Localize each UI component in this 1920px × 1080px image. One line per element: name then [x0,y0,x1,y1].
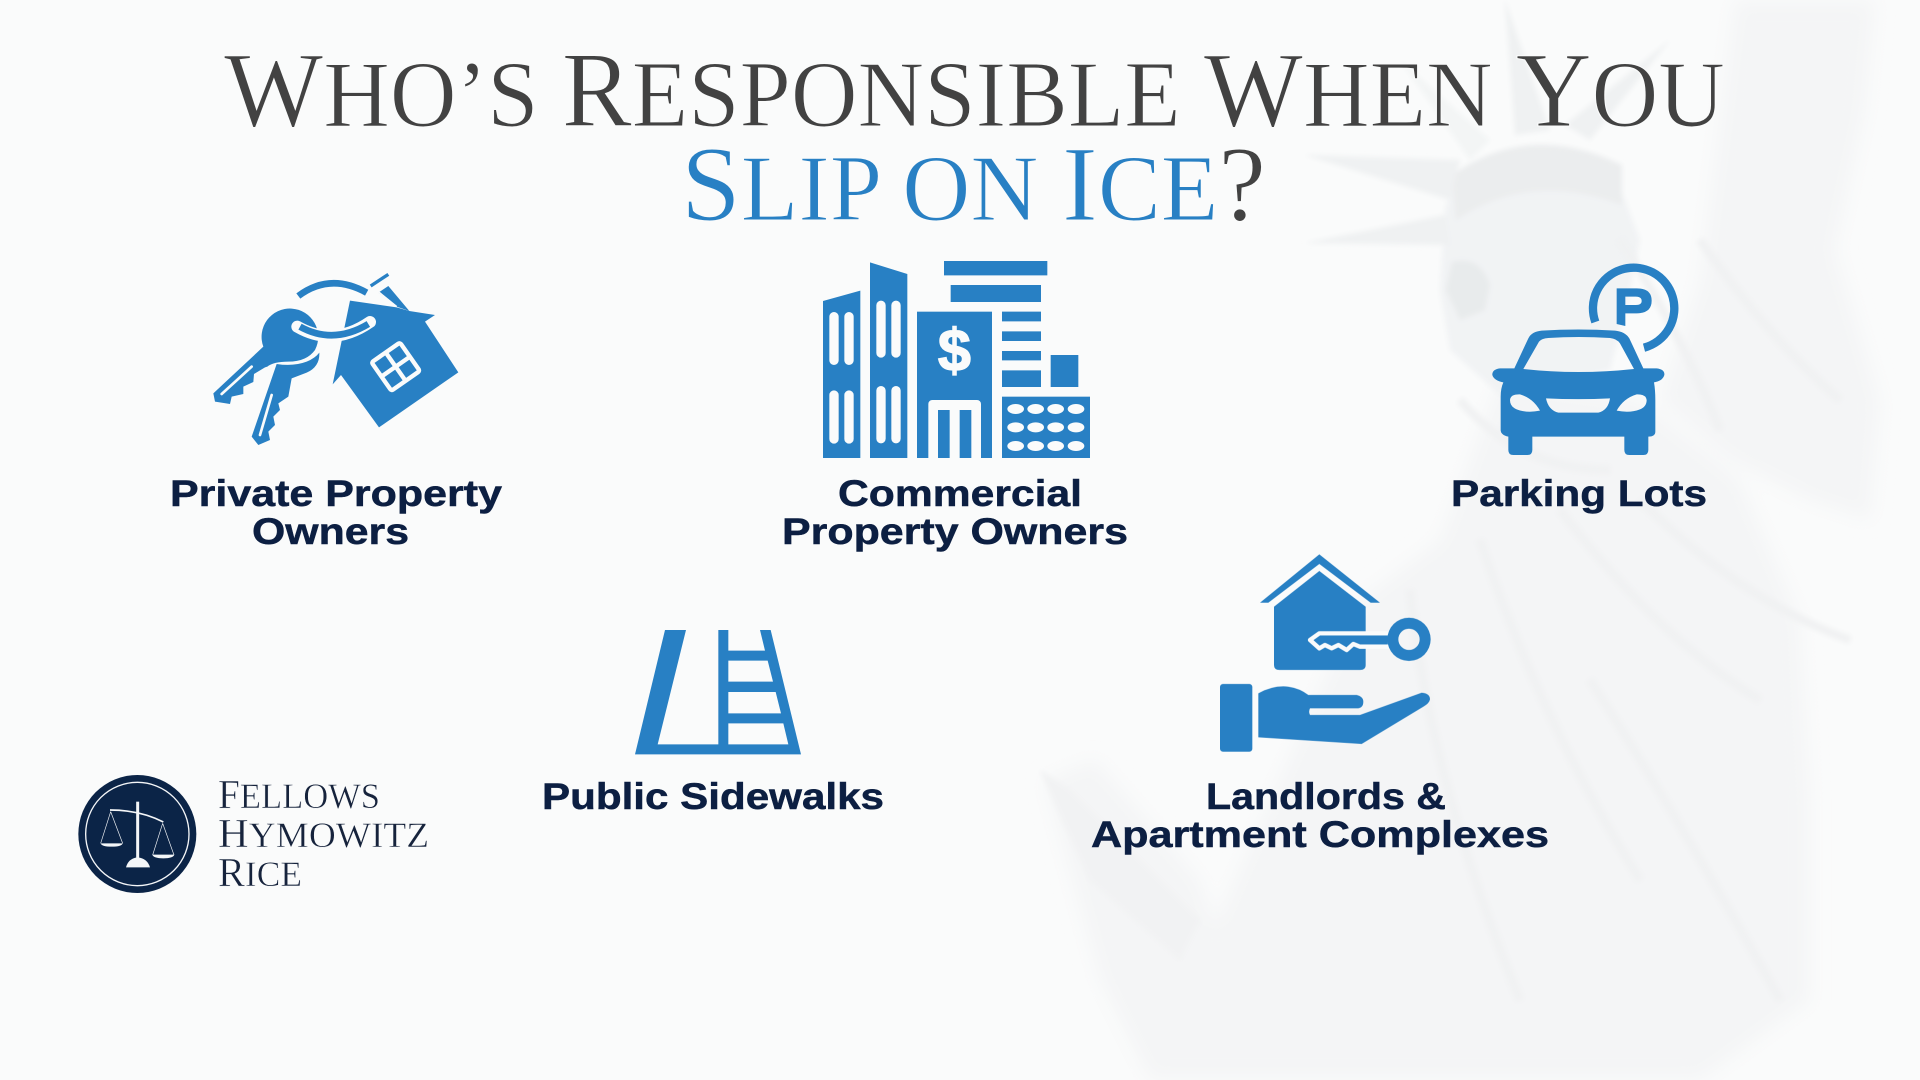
label: Apartment Complexes [1091,814,1549,855]
background: faint Statue of Liberty [1040,0,1880,1080]
label: Landlords & [1206,776,1446,817]
label: Parking Lots [1451,473,1707,514]
label [782,473,1128,552]
label: Commercial [838,473,1082,514]
label [170,473,502,552]
logo wordmark: HYMOWITZ [218,810,429,856]
title line 2: SLIP ON ICE? [681,126,1266,244]
icon: commercial buildings: $ [938,317,971,384]
icon: car with parking sign [1492,268,1674,455]
title [224,32,1725,244]
icon: commercial buildings [823,261,1090,458]
icon: house keychain [213,274,458,445]
logo wordmark: RICE [218,849,302,895]
label: Owners [252,511,409,552]
logo wordmark [218,771,429,895]
item: commercial property owners [782,261,1128,552]
item: landlords and apartment complexes [1091,554,1549,855]
icon: sidewalk [635,630,801,754]
logo: Fellows Hymowitz Rice [78,771,429,895]
logo wordmark: FELLOWS [218,771,380,817]
icon: house key in hand [1220,554,1431,752]
label: Property Owners [782,511,1128,552]
item: private property owners [170,274,502,552]
icon: scales of justice badge [78,775,196,893]
title line 1: WHO’S RESPONSIBLE WHEN YOU [224,32,1725,150]
label: Public Sidewalks [542,776,884,817]
item: parking lots [1451,268,1707,514]
label: Private Property [170,473,502,514]
item: public sidewalks [542,630,884,817]
label [1091,776,1549,855]
